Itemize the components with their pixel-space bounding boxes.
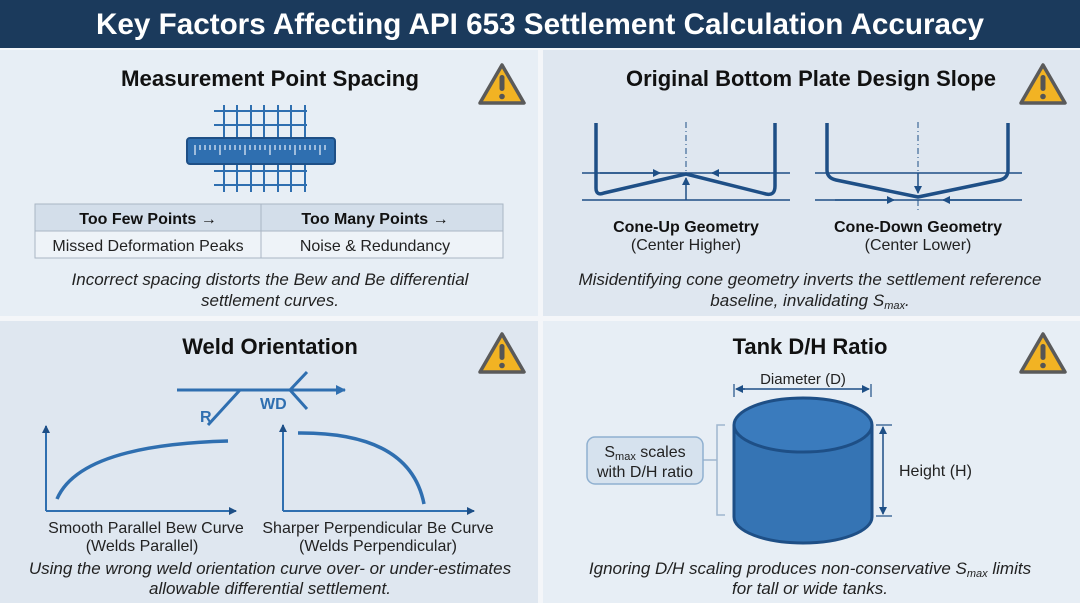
weld symbol arrow: R [200, 409, 212, 426]
diagram: cone-up [582, 122, 790, 254]
diagram: cone-down: Cone-Down Geometry [834, 219, 1002, 236]
caption: . [905, 291, 910, 310]
table: Noise & Redundancy [300, 238, 450, 255]
caption: Incorrect spacing distorts the Bew and Be differential [72, 270, 470, 289]
title: Key Factors Affecting API 653 Settlement Calculation Accuracy [96, 8, 984, 41]
callout: Smax scales [587, 425, 725, 515]
caption: Ignoring D/H scaling produces non-conservative S [589, 559, 967, 578]
table: Too Few Points → [79, 211, 217, 228]
diagram: cone-down: (Center Lower) [865, 237, 971, 254]
panel: measurement point spacing [0, 50, 538, 316]
icon: warning [1021, 65, 1065, 103]
header bar [0, 0, 1080, 48]
table: Missed Deformation Peaks [52, 238, 244, 255]
chart: parallel curve [46, 426, 244, 555]
chart: parallel curve: Smooth Parallel Bew Curve [48, 520, 244, 537]
height dimension [876, 425, 972, 516]
tank cylinder [734, 398, 872, 543]
icon: ruler on grid [187, 105, 335, 192]
table [35, 204, 503, 258]
heading: Weld Orientation [182, 334, 358, 359]
caption: baseline, invalidating S [710, 291, 884, 310]
callout: Smax scales: S [604, 444, 615, 461]
caption [72, 270, 470, 310]
caption: limits [988, 559, 1032, 578]
icon: warning [1021, 334, 1065, 372]
diameter dimension [734, 371, 871, 397]
callout: Smax scales: with D/H ratio [596, 464, 693, 481]
chart: perpendicular curve: (Welds Perpendicular) [299, 538, 457, 555]
table: Too Many Points → [301, 211, 449, 228]
caption: for tall or wide tanks. [732, 579, 888, 598]
chart: perpendicular curve: Sharper Perpendicular Be Curve [262, 520, 494, 537]
diagram: cone-up: Cone-Up Geometry [613, 219, 759, 236]
callout: Smax scales: max [615, 451, 636, 463]
weld symbol arrow: WD [260, 396, 287, 413]
caption [589, 559, 1032, 598]
caption: Using the wrong weld orientation curve over- or under-estimates [29, 559, 512, 578]
chart: parallel curve: (Welds Parallel) [86, 538, 198, 555]
heading: Measurement Point Spacing [121, 66, 419, 91]
heading: Tank D/H Ratio [733, 334, 887, 359]
diameter dimension: Diameter (D) [760, 371, 846, 388]
caption [29, 559, 512, 598]
heading: Original Bottom Plate Design Slope [626, 66, 996, 91]
caption: max [884, 300, 905, 312]
panel: tank D/H ratio [543, 321, 1080, 603]
diagram: cone-up: (Center Higher) [631, 237, 741, 254]
icon: warning [480, 65, 524, 103]
caption [578, 270, 1042, 312]
panel: bottom plate design slope [543, 50, 1080, 316]
caption: Misidentifying cone geometry inverts the settlement reference [578, 270, 1042, 289]
caption: max [967, 568, 988, 580]
icon: warning [480, 334, 524, 372]
caption: allowable differential settlement. [149, 579, 391, 598]
caption: settlement curves. [201, 291, 339, 310]
diagram: cone-down [815, 122, 1022, 254]
weld symbol arrow [177, 372, 345, 426]
chart: perpendicular curve [262, 425, 494, 555]
callout: Smax scales: scales [636, 444, 686, 461]
panel: weld orientation [0, 321, 538, 603]
height dimension: Height (H) [899, 463, 972, 480]
